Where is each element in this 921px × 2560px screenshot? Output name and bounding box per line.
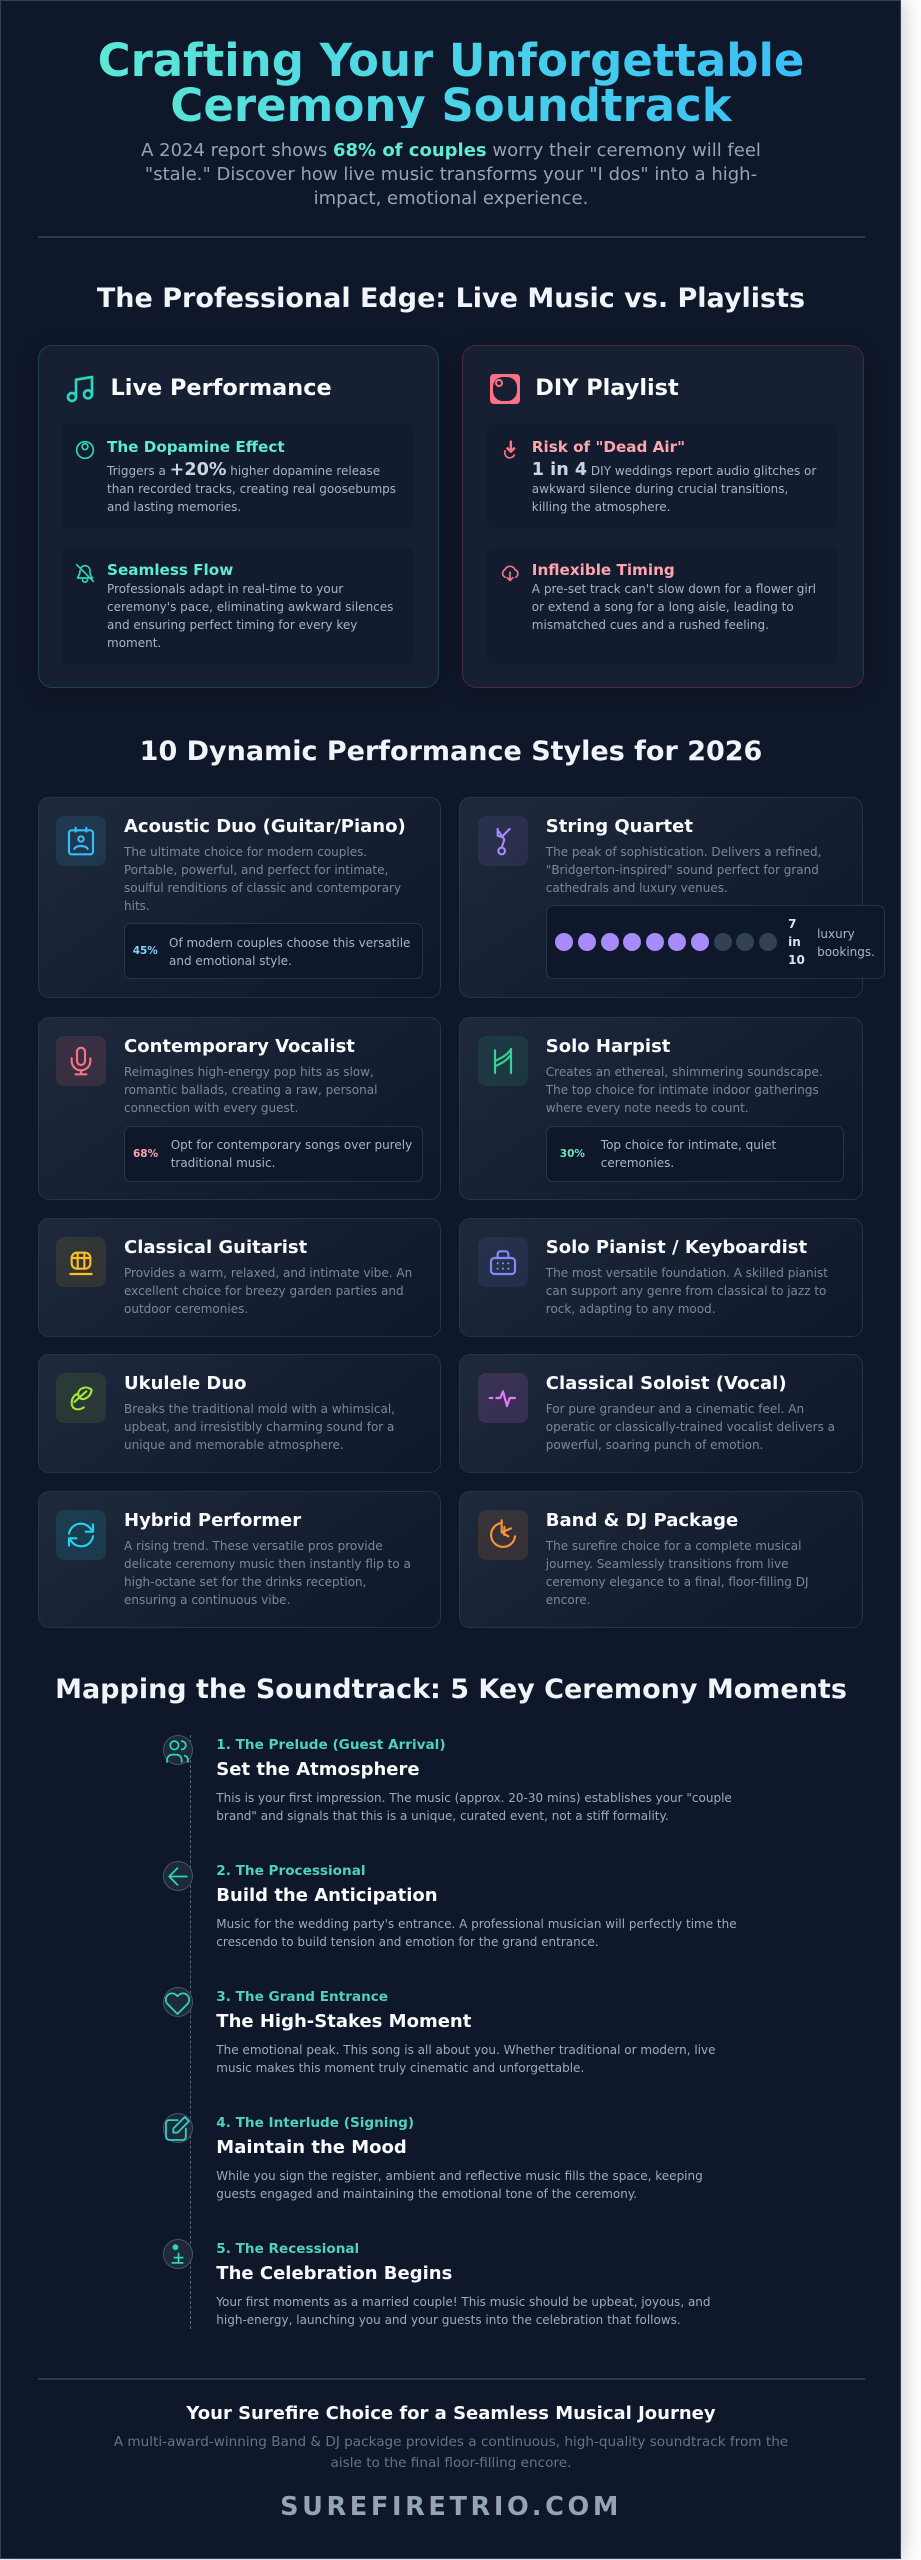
moment label: 3. The Grand Entrance — [216, 1989, 388, 2005]
item text — [532, 582, 816, 632]
card title: Acoustic Duo (Guitar/Piano) — [124, 816, 406, 837]
item: dopamine effect — [62, 423, 413, 529]
heading: professional edge: The Professional Edge: Live Music vs. Playlists — [97, 283, 805, 314]
item: seamless flow — [62, 547, 413, 665]
card text: The most versatile foundation. A skilled pianist — [546, 1266, 828, 1280]
card: hybrid performer — [38, 1491, 441, 1628]
item: inflexible timing — [487, 547, 838, 665]
moment text: While you sign the register, ambient and reflective music fills the space, keeping — [216, 2168, 703, 2182]
card text — [124, 845, 401, 913]
subtitle: "stale." Discover how live music transforms your "I dos" into a high- — [145, 164, 757, 185]
card text: operatic or classically-trained vocalist delivers a — [546, 1420, 835, 1434]
icon: refresh — [56, 1510, 106, 1560]
item text: killing the atmosphere. — [532, 500, 670, 514]
footer website: SUREFIRETRIO.COM — [280, 2492, 622, 2522]
card text: powerful, soaring punch of emotion. — [546, 1438, 763, 1452]
moment: prelude — [163, 1735, 732, 1822]
stat: 30%: 30% — [560, 1148, 585, 1160]
card text: Creates an ethereal, shimmering soundscape. — [546, 1065, 823, 1079]
moment text — [216, 2294, 711, 2326]
card text — [546, 1402, 835, 1452]
card: contemporary vocalist — [38, 1017, 441, 1200]
card text — [546, 1266, 828, 1316]
card text: upbeat, and irresistibly charming sound for a — [124, 1420, 394, 1434]
icon: keyboard — [478, 1236, 528, 1286]
title — [61, 38, 841, 128]
stat: 7 in 10 dots: luxury — [817, 927, 855, 941]
moment text: crescendo to build tension and emotion for the grand entrance. — [216, 1934, 599, 1948]
stat: 30%: Top choice for intimate, quiet — [601, 1138, 776, 1152]
card text: can support any genre from classical to jazz to — [546, 1284, 826, 1298]
moment text: Music for the wedding party's entrance. A professional musician will perfectly time the — [216, 1916, 737, 1930]
moment text: This is your first impression. The music (approx. 20-30 mins) establishes your "couple — [216, 1790, 732, 1804]
card: classical guitarist — [38, 1218, 441, 1336]
stat: 45%: 45% — [133, 945, 158, 957]
card title: Classical Soloist (Vocal) — [546, 1373, 787, 1394]
moment title: The High-Stakes Moment — [216, 2011, 471, 2032]
panel: diy playlist — [462, 345, 864, 688]
card: solo pianist — [459, 1218, 863, 1336]
card text: high-octane set for the drinks reception, — [124, 1575, 366, 1589]
card: band and dj — [459, 1491, 863, 1628]
title: Crafting Your Unforgettable — [98, 34, 804, 87]
card text: Provides a warm, relaxed, and intimate vibe. An — [124, 1266, 412, 1280]
item text — [106, 460, 396, 514]
moment: grand entrance — [163, 1987, 716, 2074]
icon: bell off — [76, 564, 94, 583]
icon: guitar — [56, 1236, 106, 1286]
stat: 68%: 68% — [133, 1148, 158, 1160]
heading: performance styles: 10 Dynamic Performance Styles for 2026 — [140, 736, 762, 767]
heading: live performance: Live Performance — [110, 375, 332, 401]
item text: A pre-set track can't slow down for a flower girl — [532, 582, 816, 596]
heading: diy playlist: DIY Playlist — [535, 375, 679, 401]
subtitle — [141, 140, 761, 209]
moment label: 1. The Prelude (Guest Arrival) — [216, 1737, 446, 1753]
card text: excellent choice for breezy garden parties and — [124, 1284, 404, 1298]
card: ukulele duo — [38, 1354, 441, 1472]
stat: 45%: Of modern couples choose this versatile — [169, 936, 410, 950]
subtitle: impact, emotional experience. — [314, 188, 588, 209]
icon: turntable — [490, 374, 520, 404]
card title: Hybrid Performer — [124, 1510, 301, 1531]
icon: cloud download — [502, 566, 519, 582]
moment title: Build the Anticipation — [216, 1885, 438, 1906]
icon: string quartet — [478, 816, 528, 866]
moment text: music makes this moment truly cinematic and unforgettable. — [216, 2060, 584, 2074]
stat: 7 in 10 dots: 7 — [788, 917, 796, 931]
moment text — [216, 1790, 732, 1822]
card: solo harpist — [459, 1017, 863, 1200]
stat: 68%: Opt for contemporary songs over purely — [171, 1138, 412, 1152]
moment text: Your first moments as a married couple! This music should be upbeat, joyous, and — [216, 2294, 711, 2308]
card title: String Quartet — [546, 816, 693, 837]
timeline line — [190, 1735, 191, 2329]
card text: journey. Seamlessly transitions from live — [546, 1557, 788, 1571]
item: dead air — [487, 423, 838, 529]
card title: Contemporary Vocalist — [124, 1036, 355, 1057]
moment: recessional — [163, 2239, 711, 2326]
icon: dopamine — [76, 440, 94, 460]
card title: Ukulele Duo — [124, 1373, 247, 1394]
stat: 7 in 10 dots: in — [788, 935, 801, 949]
card text: rock, adapting to any mood. — [546, 1302, 716, 1316]
item text: and lasting memories. — [107, 500, 241, 514]
item text: 1 in 4 DIY weddings report audio glitches or — [532, 460, 816, 480]
item text: or extend a song for a long aisle, leading to — [532, 600, 794, 614]
item title: The Dopamine Effect — [107, 438, 285, 456]
card text: where every note needs to count. — [546, 1101, 749, 1115]
stat: 45%: and emotional style. — [169, 954, 292, 968]
icon: band clock — [478, 1510, 528, 1560]
card title: Solo Pianist / Keyboardist — [546, 1237, 807, 1258]
item title: Inflexible Timing — [532, 561, 675, 579]
moment text: brand" and signals that this is a unique, curated event, not a stiff formality. — [216, 1808, 669, 1822]
moment text — [216, 2168, 703, 2200]
footer heading: Your Surefire Choice for a Seamless Musical Journey — [186, 2403, 716, 2424]
card text: encore. — [546, 1593, 591, 1607]
item text: awkward silence during crucial transitions, — [532, 482, 788, 496]
moment title: The Celebration Begins — [216, 2263, 452, 2284]
moment text: guests engaged and maintaining the emotional tone of the ceremony. — [216, 2186, 637, 2200]
icon: acoustic duo — [56, 816, 106, 866]
card text: The surefire choice for a complete musical — [546, 1539, 801, 1553]
footer text: aisle to the final floor-filling encore. — [331, 2455, 571, 2471]
card text: romantic ballads, creating a raw, personal — [124, 1083, 377, 1097]
card text: Portable, powerful, and perfect for intimate, — [124, 863, 388, 877]
card text: For pure grandeur and a cinematic feel. An — [546, 1402, 804, 1416]
moment label: 5. The Recessional — [216, 2241, 359, 2257]
item text: ceremony's pace, eliminating awkward silences — [107, 600, 393, 614]
card text — [124, 1065, 377, 1115]
stat: 7 in 10 dots: bookings. — [817, 945, 875, 959]
card: acoustic duo — [38, 797, 441, 998]
footer text: A multi-award-winning Band & DJ package provides a continuous, high-quality soundtrack from the — [114, 2434, 788, 2450]
icon: microphone — [56, 1036, 106, 1086]
stat: 68% — [124, 1126, 423, 1182]
card text — [124, 1266, 412, 1316]
stat: 30% — [546, 1126, 844, 1182]
card: classical soloist — [459, 1354, 863, 1472]
card text: The ultimate choice for modern couples. — [124, 845, 367, 859]
card title: Band & DJ Package — [546, 1510, 738, 1531]
card text: The peak of sophistication. Delivers a refined, — [546, 845, 821, 859]
icon: harp — [478, 1036, 528, 1086]
moment: processional — [163, 1861, 737, 1948]
icon: guests — [162, 1735, 192, 1765]
item text: and ensuring perfect timing for every key — [107, 618, 357, 632]
card text — [124, 1539, 411, 1607]
moment title: Maintain the Mood — [216, 2137, 407, 2158]
moment text — [216, 2042, 716, 2074]
card text: outdoor ceremonies. — [124, 1302, 248, 1316]
icon: pulse — [478, 1372, 528, 1422]
heading: ceremony moments: Mapping the Soundtrack: 5 Key Ceremony Moments — [55, 1674, 847, 1705]
card text: cathedrals and luxury venues. — [546, 881, 728, 895]
card text: connection with every guest. — [124, 1101, 298, 1115]
card title: Classical Guitarist — [124, 1237, 307, 1258]
item text: Professionals adapt in real-time to your — [107, 582, 343, 596]
card text — [546, 1065, 823, 1115]
icon: dead air — [504, 440, 516, 459]
item text: Triggers a +20% higher dopamine release — [107, 460, 380, 480]
title: Ceremony Soundtrack — [170, 79, 732, 132]
moment text: high-energy, launching you and your guests into the celebration that follows. — [216, 2312, 681, 2326]
card text: Breaks the traditional mold with a whimsical, — [124, 1402, 395, 1416]
stat: 30%: ceremonies. — [601, 1156, 674, 1170]
moment text — [216, 1916, 737, 1948]
card text: unique and memorable atmosphere. — [124, 1438, 344, 1452]
stat: 68%: traditional music. — [171, 1156, 275, 1170]
card text: hits. — [124, 899, 150, 913]
moment text: The emotional peak. This song is all about you. Whether traditional or modern, live — [216, 2042, 716, 2056]
card text: "Bridgerton-inspired" sound perfect for grand — [546, 863, 819, 877]
card title: Solo Harpist — [546, 1036, 670, 1057]
item text — [532, 460, 816, 514]
card text: ceremony elegance to a final, floor-filling DJ — [546, 1575, 808, 1589]
icon: ukulele — [56, 1372, 106, 1422]
item text: mismatched cues and a rushed feeling. — [532, 618, 769, 632]
moment: interlude — [163, 2113, 703, 2200]
card text: delicate ceremony music then instantly flip to a — [124, 1557, 411, 1571]
card text: ensuring a continuous vibe. — [124, 1593, 290, 1607]
stat: 7 in 10 dots: 10 — [788, 953, 805, 967]
card text: The top choice for intimate indoor gatherings — [546, 1083, 819, 1097]
moment label: 4. The Interlude (Signing) — [216, 2115, 414, 2131]
card text: Reimagines high-energy pop hits as slow, — [124, 1065, 374, 1079]
icon: heart — [162, 1987, 192, 2017]
icon: arrow left — [162, 1861, 192, 1891]
item text: than recorded tracks, creating real goosebumps — [107, 482, 396, 496]
moment label: 2. The Processional — [216, 1863, 366, 1879]
stat: 45% — [124, 923, 423, 979]
card text — [546, 845, 821, 895]
icon: music note — [66, 376, 94, 402]
moment title: Set the Atmosphere — [216, 1759, 420, 1780]
card text: soulful renditions of classic and contemporary — [124, 881, 401, 895]
card text: A rising trend. These versatile pros provide — [124, 1539, 383, 1553]
icon: edit — [162, 2113, 192, 2143]
card text — [546, 1539, 808, 1607]
item title: Seamless Flow — [107, 561, 233, 579]
subtitle: A 2024 report shows 68% of couples worry their ceremony will feel — [141, 140, 761, 161]
item text: moment. — [107, 636, 161, 650]
item text — [107, 582, 393, 650]
card text — [124, 1402, 395, 1452]
icon: celebration — [162, 2239, 192, 2269]
card: string quartet — [459, 797, 863, 998]
panel: live performance — [38, 345, 438, 688]
stat: 7 in 10 dots — [546, 905, 885, 979]
item title: Risk of "Dead Air" — [532, 438, 685, 456]
footer text — [114, 2434, 788, 2471]
